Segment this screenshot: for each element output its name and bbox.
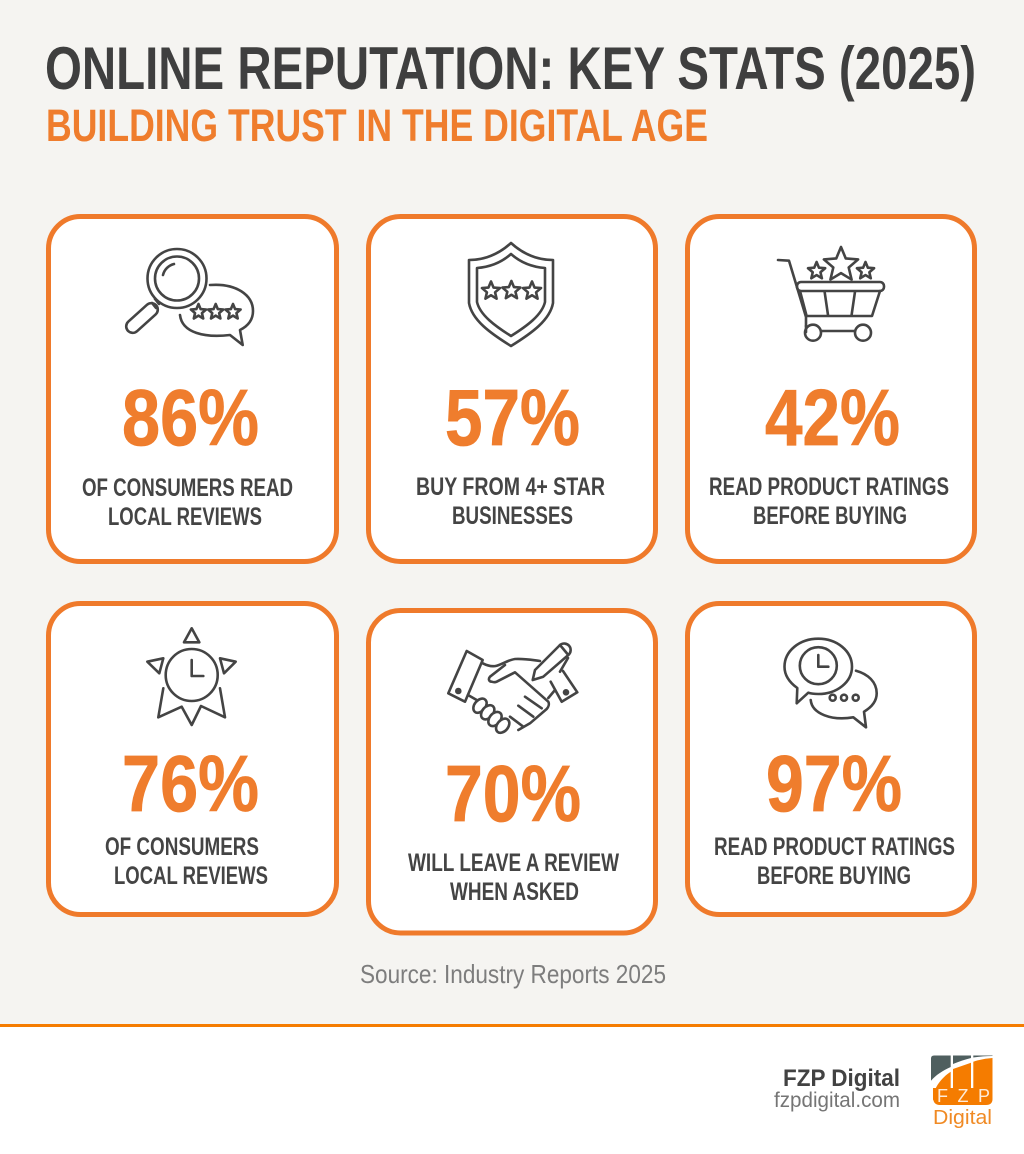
label: buy from 4+ star businesses: BUSINESSES [452, 502, 573, 530]
label: buy from 4+ star businesses: BUY FROM 4+ STAR [416, 473, 605, 501]
icon: shield with three stars [469, 243, 553, 346]
label: read product ratings before buying: BEFORE BUYING [757, 862, 911, 890]
brand url: fzpdigital.com [774, 1089, 900, 1112]
panel: 70% will leave a review [368, 610, 656, 933]
panel: 76% of consumers [48, 604, 336, 914]
stat: 42%: 42% [765, 373, 900, 462]
label: will leave a review when asked: WHEN ASKED [450, 878, 579, 906]
label: of consumers read local reviews [82, 474, 293, 531]
panel: 97% product ratings [688, 604, 974, 914]
label: will leave a review when asked: WILL LEAVE A REVIEW [408, 849, 619, 877]
source note: Source: Industry Reports 2025 [360, 959, 666, 989]
label: read product ratings before buying: READ PRODUCT RATINGS [714, 833, 955, 861]
label: buy from 4+ star businesses [416, 473, 605, 530]
panel: 57% 4+ star businesses [368, 216, 656, 562]
panel: 86% local reviews [48, 216, 336, 562]
icon: clock badge [147, 628, 236, 725]
label: read product ratings before buying: READ PRODUCT RATINGS [709, 473, 949, 501]
icon: shopping cart with stars [778, 247, 884, 341]
label: of consumers local reviews [105, 833, 268, 890]
logo: Digital [933, 1107, 992, 1129]
label: of consumers read local reviews: OF CONSUMERS READ [82, 474, 293, 502]
label: of consumers local reviews: OF CONSUMERS [105, 833, 259, 861]
label: will leave a review when asked [408, 849, 619, 906]
logo [931, 1056, 992, 1129]
footer [0, 1024, 1024, 1154]
label: read product ratings before buying [709, 473, 949, 530]
stat: 76%: 76% [122, 739, 259, 828]
stat: 97%: 97% [766, 739, 902, 828]
stat: 70%: 70% [445, 749, 581, 838]
label: read product ratings before buying: BEFORE BUYING [753, 502, 907, 530]
label: of consumers local reviews: LOCAL REVIEWS [114, 862, 268, 890]
logo: FZP [937, 1086, 990, 1106]
icon: handshake with pen [448, 643, 577, 735]
stat: 57%: 57% [445, 373, 580, 462]
panel: 42% product ratings [688, 216, 974, 562]
icon: speech bubbles with clock [784, 639, 877, 727]
brand name: FZP Digital [783, 1065, 900, 1092]
label: of consumers read local reviews: LOCAL REVIEWS [108, 503, 262, 531]
stat: 86%: 86% [122, 373, 259, 462]
label: read product ratings before buying [714, 833, 955, 890]
subtitle: BUILDING TRUST IN THE DIGITAL AGE [46, 100, 708, 151]
icon: magnifier with star speech bubble [124, 249, 253, 345]
